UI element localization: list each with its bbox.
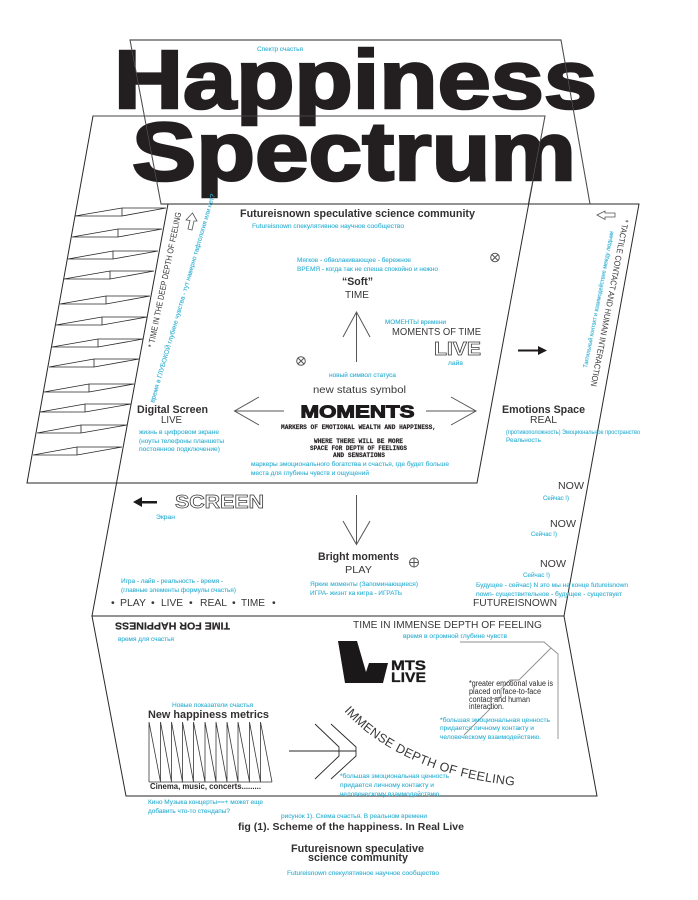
icon: plus circle xyxy=(410,558,418,567)
caption: cinema translation xyxy=(148,799,263,815)
logo: MTS Live xyxy=(338,641,426,685)
rotated label: tactile contact: * TACTILE CONTACT AND HUMAN INTERACTION xyxy=(589,219,631,387)
label: bright moments: PLAY xyxy=(345,564,372,576)
label: digital screen: Digital Screen xyxy=(137,404,208,416)
list: play live real time: PLAY xyxy=(120,597,146,609)
label: emotions space: Emotions Space xyxy=(502,404,585,416)
icon: crossed circle left xyxy=(297,357,305,365)
caption: digital screen translation: (ноуты телефоны планшеты xyxy=(139,438,224,445)
text block: markers of emotional wealth: MARKERS OF EMOTIONAL WEALTH AND HAPPINESS, xyxy=(281,424,436,431)
connector lines to callout xyxy=(460,642,558,739)
list: play live real time xyxy=(111,597,276,609)
label: soft time xyxy=(342,276,373,301)
panel: main central plane outline xyxy=(92,204,639,616)
label: soft time: “Soft” xyxy=(342,276,373,288)
caption: figure translation: рисунок 1). Схема счастья. В реальном времени xyxy=(281,813,427,820)
caption: digital screen translation xyxy=(139,429,224,453)
arrow: up xyxy=(343,312,370,362)
caption: callout translation: *большая эмоциональная ценность xyxy=(440,716,551,724)
caption: markers translation xyxy=(251,460,449,477)
footer heading: community: Futureisnown speculative xyxy=(291,843,424,855)
heading: time in immense depth: TIME IN IMMENSE DEPTH OF FEELING xyxy=(353,619,542,631)
caption: spectrum translation: Спектр счастья xyxy=(257,46,303,53)
caption: emotions space translation xyxy=(506,429,640,444)
caption: formula translation: Игра - лайв - реальность - время - xyxy=(121,577,223,585)
arrow: down xyxy=(343,495,370,544)
caption: callout translation xyxy=(440,716,551,741)
caption: curved label translation: человеческому взаимодействию. xyxy=(340,790,441,798)
label: emotions space xyxy=(502,404,585,426)
callout: greater emotional value: contact and human xyxy=(469,695,530,704)
rotated caption: tactile translation: Тактильный контакт и взаимодействие между людьми xyxy=(582,231,615,368)
rotated caption: deep depth translation: время в ГЛУБОКОЙ глубине чувства - тут наверно тафтология или нет? xyxy=(147,192,217,404)
ladder steps on left side xyxy=(33,208,166,455)
list: play live real time: • xyxy=(111,597,115,609)
label: digital screen: LIVE xyxy=(161,414,182,426)
caption: new metrics translation: Новые показатели счастья xyxy=(172,702,253,709)
list: play live real time: • xyxy=(272,597,276,609)
outlined label: live: LIVE xyxy=(434,339,481,359)
list: play live real time: LIVE xyxy=(161,597,183,609)
list: play live real time: TIME xyxy=(241,597,265,609)
list: play live real time: • xyxy=(189,597,193,609)
label: bright moments: Bright moments xyxy=(318,551,399,563)
text block: markers of emotional wealth: AND SENSATIONS xyxy=(333,452,385,459)
caption: screen translation: Экран xyxy=(156,514,175,521)
label: soft time: TIME xyxy=(345,289,369,301)
caption: digital screen translation: жизнь в цифровом экране xyxy=(139,429,219,436)
arrow: black right xyxy=(518,346,547,355)
title: Happiness xyxy=(114,33,597,126)
caption: bright moments translation: ИГРА- жизнт ка кигра - ИГРАТЬ xyxy=(310,590,402,597)
callout: greater emotional value xyxy=(469,679,553,711)
figure caption: fig (1). Scheme of the happiness. In Real Live xyxy=(238,821,464,833)
label: emotions space: REAL xyxy=(530,414,557,426)
arrow: right xyxy=(426,397,476,425)
caption: emotions space translation: Реальность xyxy=(506,437,542,444)
upside-down heading: time for happiness: TIME FOR HAPPINESS xyxy=(115,620,230,632)
title: Spectrum xyxy=(132,105,576,198)
list: now repeated xyxy=(523,480,584,579)
list: now repeated: Сейчас !) xyxy=(523,571,550,579)
arrow: left xyxy=(234,397,284,425)
text block: markers of emotional wealth xyxy=(281,424,436,459)
caption: formula translation: (главные элементы формулы счастья) xyxy=(121,587,236,594)
heading: moments: MOMENTS xyxy=(300,402,414,422)
caption: markers translation: места для глубины чувств и ощущений xyxy=(251,469,369,477)
logo: MTS Live: LIVE xyxy=(391,670,426,685)
list: now repeated: NOW xyxy=(550,518,576,530)
caption: futureisnown explanation xyxy=(476,581,628,598)
icon: hollow up arrow xyxy=(186,213,197,230)
caption: emotions space translation: (противоположность) Эмоциональное пространство xyxy=(506,429,640,436)
panel: bottom plane outline xyxy=(92,616,597,796)
label: new status symbol: new status symbol xyxy=(313,384,406,396)
caption: callout translation: человеческому взаимодействию. xyxy=(440,733,541,741)
caption: immense depth translation: время в огромной глубине чувств xyxy=(403,632,508,640)
caption: cinema translation: добавить что-то стендапы? xyxy=(148,807,230,815)
caption: soft time translation: ВРЕМЯ - когда так не спеша спокойно и нежно xyxy=(297,265,438,273)
caption: callout translation: придается личному контакту и xyxy=(440,725,534,732)
text block: markers of emotional wealth: SPACE FOR DEPTH OF FEELINGS xyxy=(310,445,407,452)
caption: soft time translation xyxy=(297,256,438,273)
callout: greater emotional value: *greater emotional value is xyxy=(469,679,553,688)
icon: crossed circle top right xyxy=(491,253,499,262)
caption: futureisnown explanation: Будущее - сейчас) N это мы на конце futureisnown xyxy=(476,581,628,589)
title xyxy=(114,33,597,198)
list: now repeated: Сейчас !) xyxy=(531,530,557,538)
rotated label: deep depth of feeling: * TIME IN THE DEEP DEPTH OF FEELING xyxy=(146,211,183,348)
heading: new happiness metrics: New happiness metrics xyxy=(148,709,269,721)
logo: MTS Live: MTS xyxy=(391,658,426,673)
caption: curved label translation: придается личному контакту и xyxy=(340,782,434,789)
chart: metrics sawtooth xyxy=(149,722,272,782)
caption: moments of time translation: МОМЕНТЫ времени xyxy=(385,319,446,326)
list: now repeated: NOW xyxy=(540,558,566,570)
footer caption: community translation: Futureisnown спекулятивное научное сообщество xyxy=(287,869,439,877)
caption: curved label translation xyxy=(340,772,450,798)
caption: cinema translation: Кино Музыка концерты==+ может еще xyxy=(148,799,263,806)
callout: greater emotional value: interaction. xyxy=(469,702,504,711)
callout: greater emotional value: placed on face-to-face xyxy=(469,687,541,696)
caption: digital screen translation: постоянное подключение) xyxy=(139,446,220,453)
footer heading: community xyxy=(291,843,424,864)
list: now repeated: NOW xyxy=(558,480,584,492)
caption: time for happiness translation: время для счастья xyxy=(118,636,174,643)
label: moments of time: MOMENTS OF TIME xyxy=(392,326,481,338)
label: futureisnown: FUTUREISNOWN xyxy=(473,597,557,609)
caption: bright moments translation: Яркие моменты (Запоминающиеся) xyxy=(310,581,418,588)
arrow: feathered arrow xyxy=(289,724,356,779)
list: play live real time: • xyxy=(151,597,155,609)
caption: live translation: лайв xyxy=(448,359,464,367)
panel: screen plane outline xyxy=(27,116,545,483)
caption: status symbol translation: новый символ статуса xyxy=(329,371,396,379)
heading: community: Futureisnown speculative science community xyxy=(240,208,476,220)
icon: hollow left arrow xyxy=(597,211,615,220)
curved label: immense depth of feeling: IMMENSE DEPTH OF FEELING xyxy=(344,706,514,786)
list: play live real time: • xyxy=(232,597,236,609)
panel: back spectrum plane xyxy=(130,40,590,204)
arrow: black left xyxy=(133,497,157,507)
label: digital screen xyxy=(137,404,208,426)
label: bright moments xyxy=(318,551,399,576)
caption: formula translation xyxy=(121,577,236,594)
caption: futureisnown explanation: nown- существительное - будущее - существует xyxy=(476,590,622,598)
outlined label: screen: SCREEN xyxy=(175,492,264,512)
footer heading: community: science community xyxy=(308,852,409,864)
caption: curved label translation: *большая эмоциональная ценность xyxy=(340,772,450,780)
caption: markers translation: маркеры эмоционального богатства и счастья, где будет больше xyxy=(251,460,449,468)
list: now repeated: Сейчас !) xyxy=(543,494,569,502)
text block: markers of emotional wealth: WHERE THERE WILL BE MORE xyxy=(314,438,403,445)
caption: community translation: Futureisnown спекулятивное научное сообщество xyxy=(252,222,404,230)
caption: bright moments translation xyxy=(310,581,418,597)
list: play live real time: REAL xyxy=(200,597,227,609)
caption: soft time translation: Мягкое - обволакивающее - бережное xyxy=(297,256,411,264)
label: cinema music concerts: Cinema, music, concerts......... xyxy=(150,782,261,791)
